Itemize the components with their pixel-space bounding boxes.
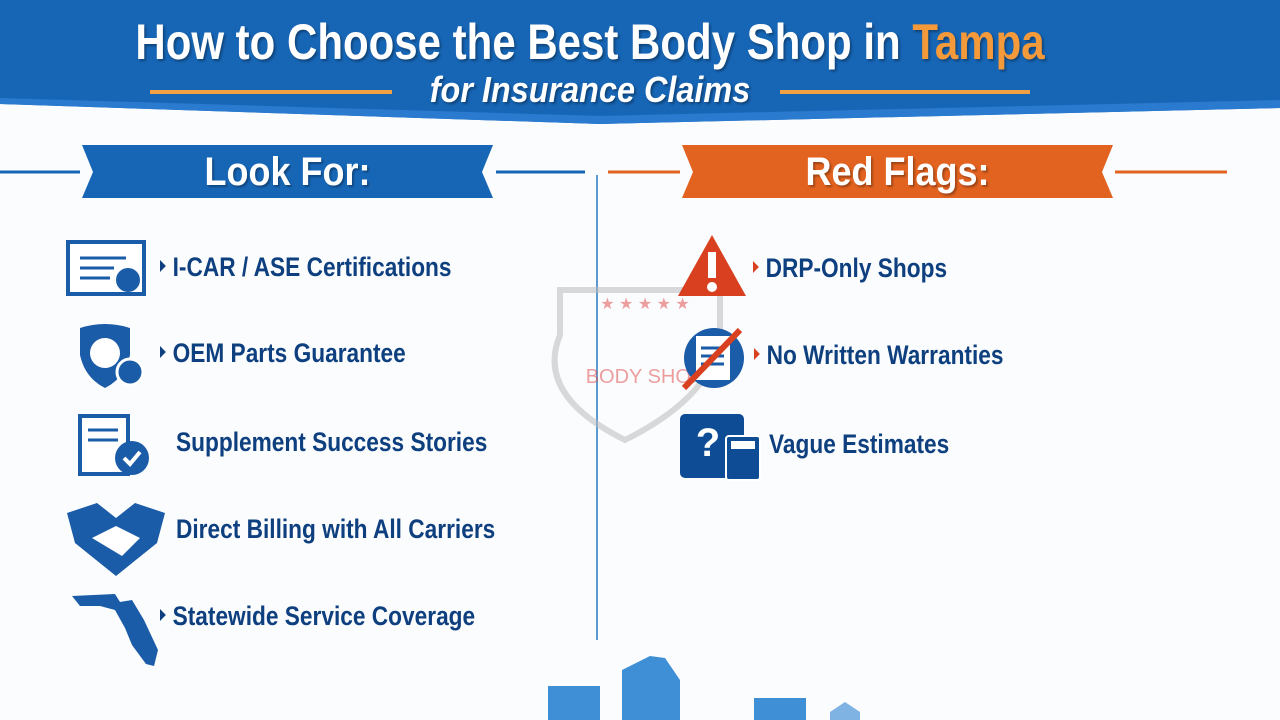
item: direct billing bbox=[67, 503, 495, 576]
item: vague estimates: ? bbox=[696, 421, 720, 465]
item: DRP-only: DRP-Only Shops bbox=[766, 253, 947, 283]
item: OEM parts: OEM Parts Guarantee bbox=[173, 338, 406, 368]
item: no warranties: No Written Warranties bbox=[767, 340, 1004, 370]
header band bbox=[0, 0, 1280, 124]
banner: red flags bbox=[608, 145, 1227, 198]
banner: look for bbox=[0, 145, 585, 198]
watermark logo bbox=[552, 287, 723, 444]
subtitle: for Insurance Claims bbox=[430, 69, 750, 110]
watermark logo: ★ ★ ★ ★ ★ bbox=[600, 296, 690, 313]
title: How to Choose the Best Body Shop in Tampa bbox=[135, 14, 1045, 70]
item: vague estimates bbox=[680, 414, 949, 479]
item: direct billing: Direct Billing with All Carriers bbox=[176, 514, 495, 544]
item: no warranties bbox=[682, 328, 1004, 390]
divider bbox=[596, 175, 598, 640]
watermark logo: BODY SHOP bbox=[586, 366, 704, 388]
item: statewide: Statewide Service Coverage bbox=[173, 601, 475, 631]
item: supplement: Supplement Success Stories bbox=[176, 427, 487, 457]
item: certifications bbox=[66, 240, 452, 296]
item: statewide bbox=[72, 594, 475, 666]
skyline bbox=[548, 656, 860, 720]
banner: look for: Look For: bbox=[205, 150, 370, 194]
item: vague estimates: Vague Estimates bbox=[769, 429, 949, 459]
banner: red flags: Red Flags: bbox=[805, 150, 990, 194]
item: certifications: I-CAR / ASE Certifications bbox=[173, 252, 452, 282]
item: supplement bbox=[78, 414, 487, 476]
item: DRP-only bbox=[678, 235, 947, 296]
item: OEM parts bbox=[80, 324, 406, 388]
